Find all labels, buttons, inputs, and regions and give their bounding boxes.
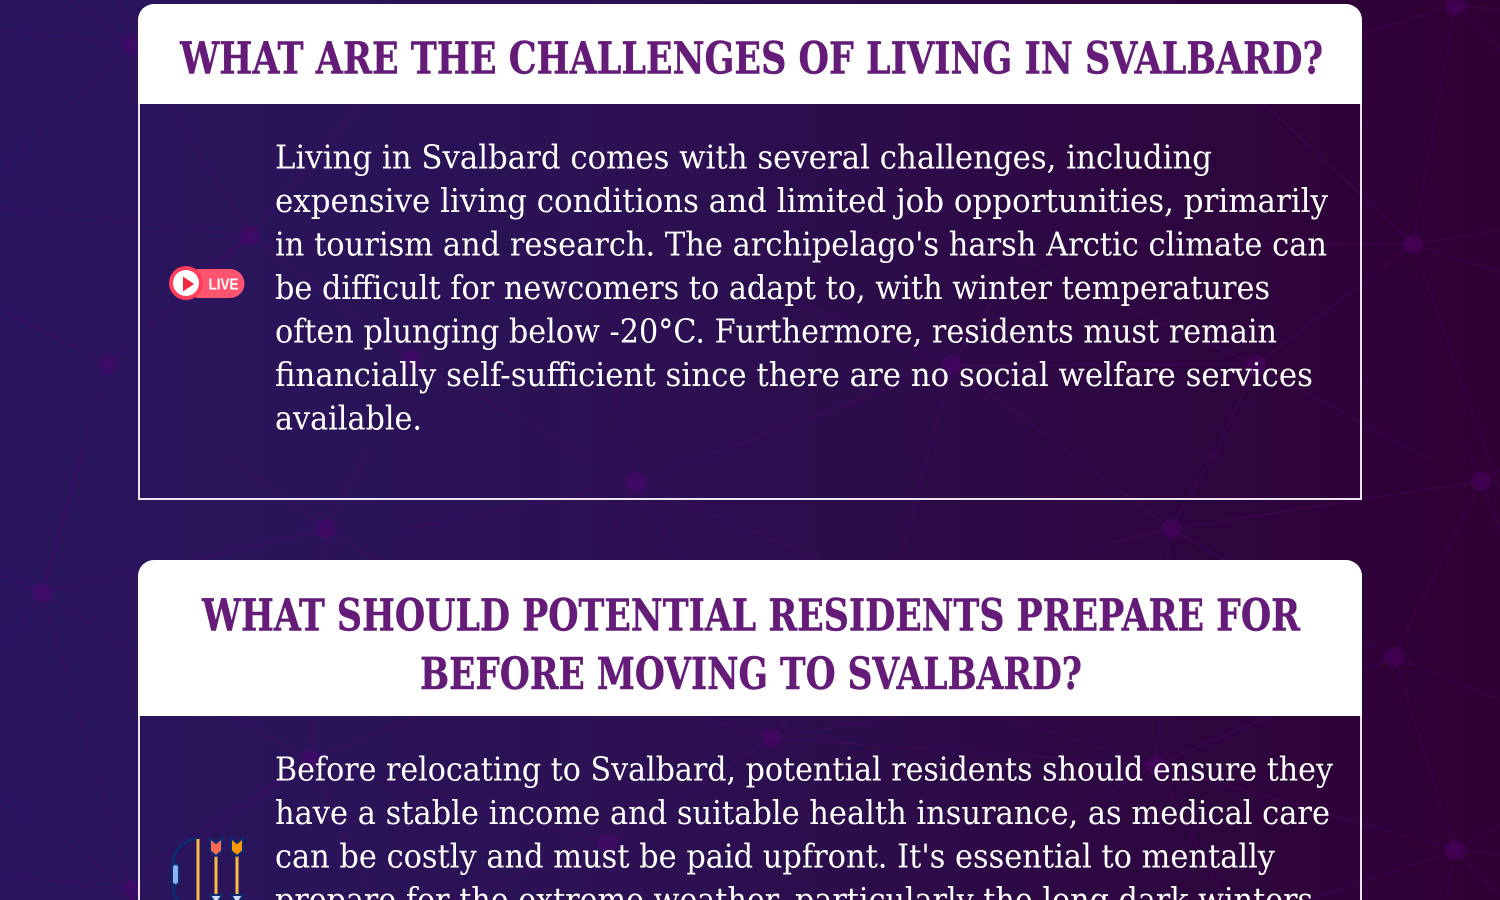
body text: have a stable income and suitable health insurance, as medical care xyxy=(275,793,1330,832)
body text: Before relocating to Svalbard, potential residents should ensure they xyxy=(275,750,1333,788)
heading xyxy=(201,590,1300,700)
body text xyxy=(275,750,1333,900)
icon: live badge xyxy=(169,266,244,300)
body text: in tourism and research. The archipelago's harsh Arctic climate can xyxy=(275,224,1327,264)
panel body outline xyxy=(139,700,1361,900)
body text: financially self-sufficient since there are no social welfare services xyxy=(275,355,1313,394)
panel: challenges of living in Svalbard xyxy=(138,4,1362,499)
icon: bow and arrows xyxy=(172,838,243,900)
panel: preparing before moving to Svalbard xyxy=(138,560,1362,900)
body text: can be costly and must be paid upfront. It's essential to mentally xyxy=(275,836,1275,876)
body text: often plunging below -20°C. Furthermore, residents must remain xyxy=(275,312,1277,350)
header box xyxy=(138,560,1362,716)
heading: BEFORE MOVING TO SVALBARD? xyxy=(420,649,1082,700)
panel body outline xyxy=(139,100,1361,499)
body text: be difficult for newcomers to adapt to, with winter temperatures xyxy=(275,268,1270,307)
body text xyxy=(275,138,1328,438)
body text: available. xyxy=(275,398,422,438)
header box xyxy=(138,4,1362,104)
icon: live badge: LIVE xyxy=(208,276,238,294)
body text: Living in Svalbard comes with several challenges, including xyxy=(275,138,1212,176)
body text: expensive living conditions and limited job opportunities, primarily xyxy=(275,181,1328,220)
